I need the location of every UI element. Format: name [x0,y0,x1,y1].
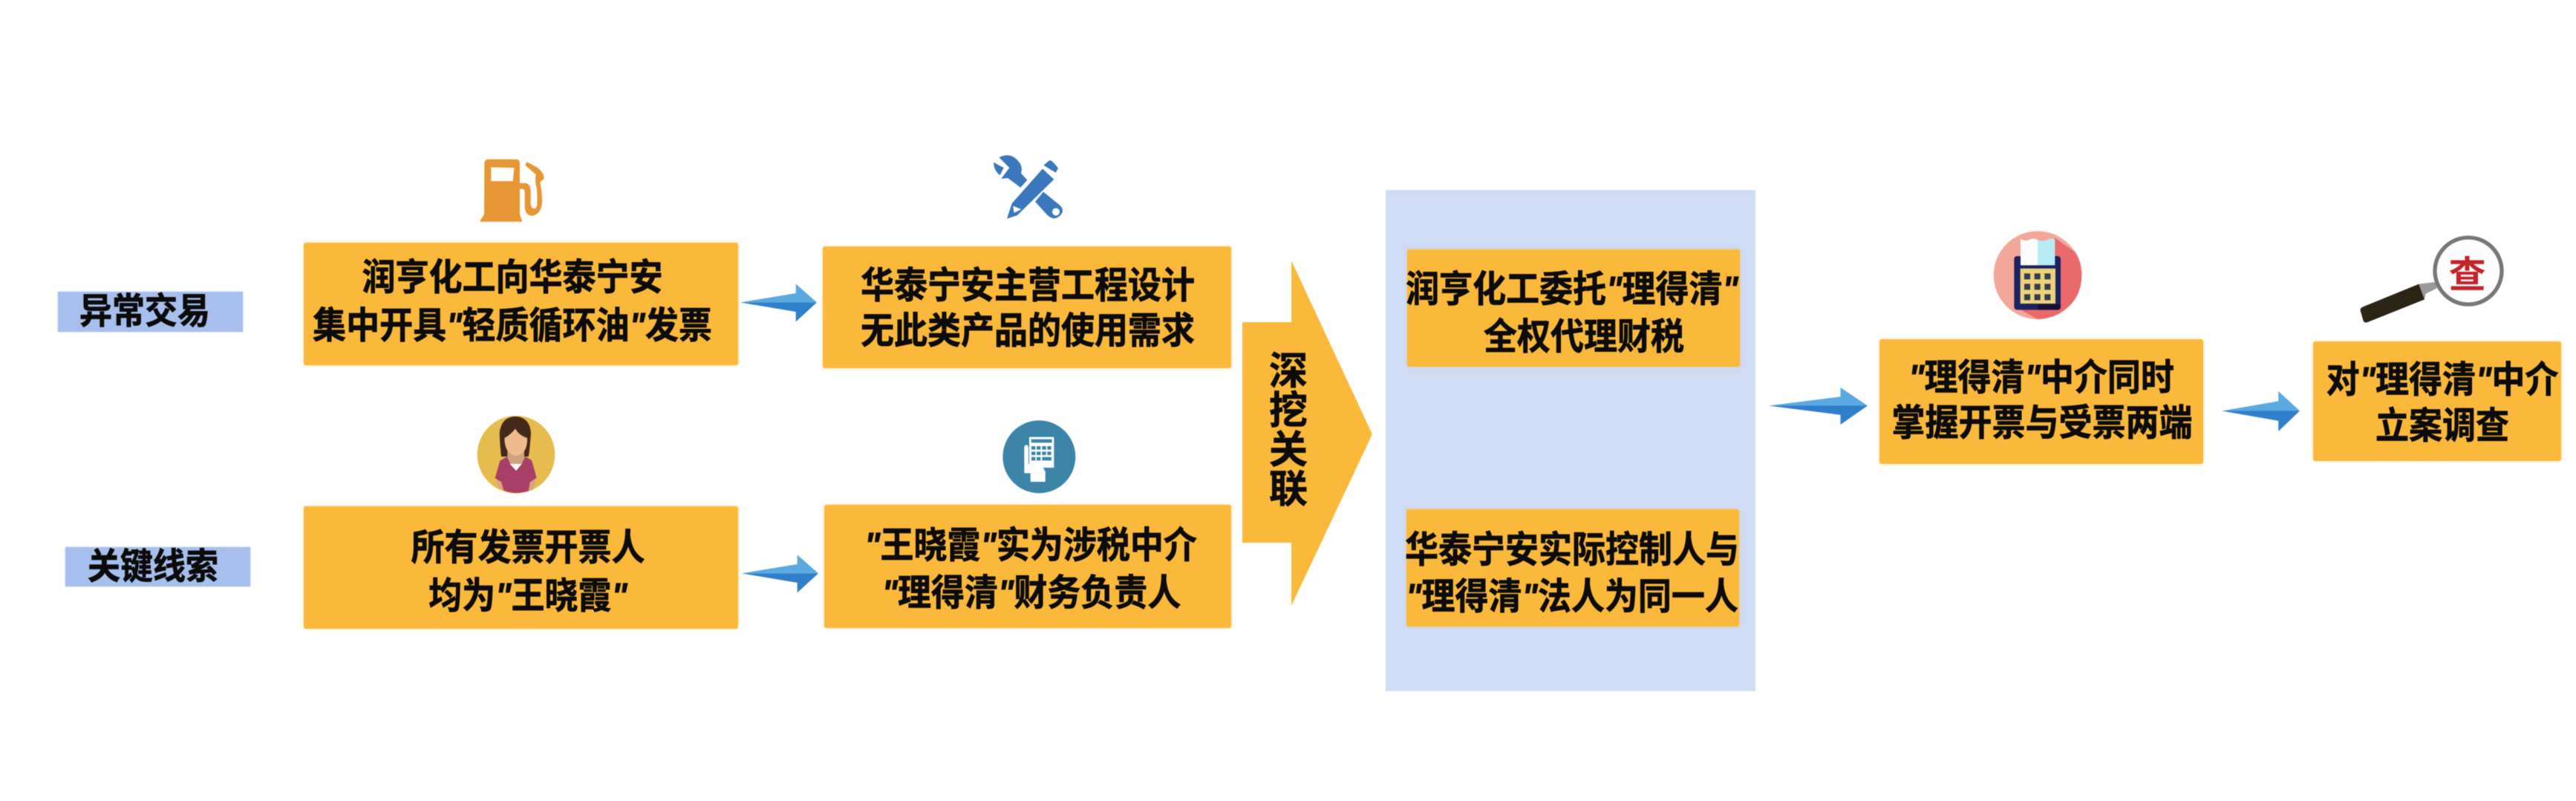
box: investigation [2313,341,2561,461]
box: same controller [1406,509,1739,627]
icon: magnifier with character: 查 [2449,254,2486,295]
icon: calculator in hand [1002,420,1077,494]
box: invoice issue: 润亨化工向华泰宁安 [362,256,663,298]
box: main business [823,246,1231,368]
box: same controller: "理得清"法人为同一人 [1406,575,1738,618]
box: main business: 无此类产品的使用需求 [861,310,1195,352]
icon: magnifier with character [2360,235,2504,324]
arrow: dig deeper big arrow: 挖 [1269,390,1308,433]
box: Wang Xiaoxia role [824,505,1231,628]
box: agent controls both ends: 掌握开票与受票两端 [1891,402,2193,444]
arrow: dig deeper big arrow: 联 [1269,468,1308,511]
box: Wang Xiaoxia role: "王晓霞"实为涉税中介 [864,524,1197,566]
box: investigation: 对"理得清"中介 [2326,359,2558,401]
arrow: row 2 [741,555,818,593]
icon: wrench and pencil [993,154,1063,220]
panel: blue background [1386,190,1755,691]
box: entrust agent: 全权代理财税 [1484,316,1684,358]
label: abnormal transactions [58,292,243,332]
box: entrust agent [1407,249,1740,367]
box: investigation: 立案调查 [2376,405,2509,447]
icon: fuel pump [480,159,545,223]
arrow: dig deeper big arrow: 关 [1269,429,1308,472]
box: Wang Xiaoxia role: "理得清"财务负责人 [882,572,1181,613]
box: invoice issue [304,243,738,365]
box: agent controls both ends [1879,339,2203,464]
box: main business: 华泰宁安主营工程设计 [861,264,1195,306]
label: abnormal transactions: 异常交易 [79,291,210,331]
icon: woman avatar [477,415,555,494]
box: all invoice issuers [304,506,738,629]
label: key clue [65,547,250,586]
box: agent controls both ends: "理得清"中介同时 [1908,356,2174,398]
box: invoice issue: 集中开具"轻质循环油"发票 [313,304,712,346]
box: entrust agent: 润亨化工委托"理得清" [1406,268,1738,310]
label: key clue: 关键线索 [88,546,218,586]
arrow: row 1 [740,284,817,322]
icon: receipt machine [1993,230,2082,320]
box: all invoice issuers: 所有发票开票人 [411,526,645,569]
arrow: dig deeper big arrow [1242,261,1373,606]
arrow: dig deeper big arrow: 深 [1269,350,1308,393]
box: same controller: 华泰宁安实际控制人与 [1405,529,1739,570]
arrow: to agent box [1769,388,1868,425]
arrow: to investigation box [2222,390,2301,432]
box: all invoice issuers: 均为"王晓霞" [428,575,627,616]
